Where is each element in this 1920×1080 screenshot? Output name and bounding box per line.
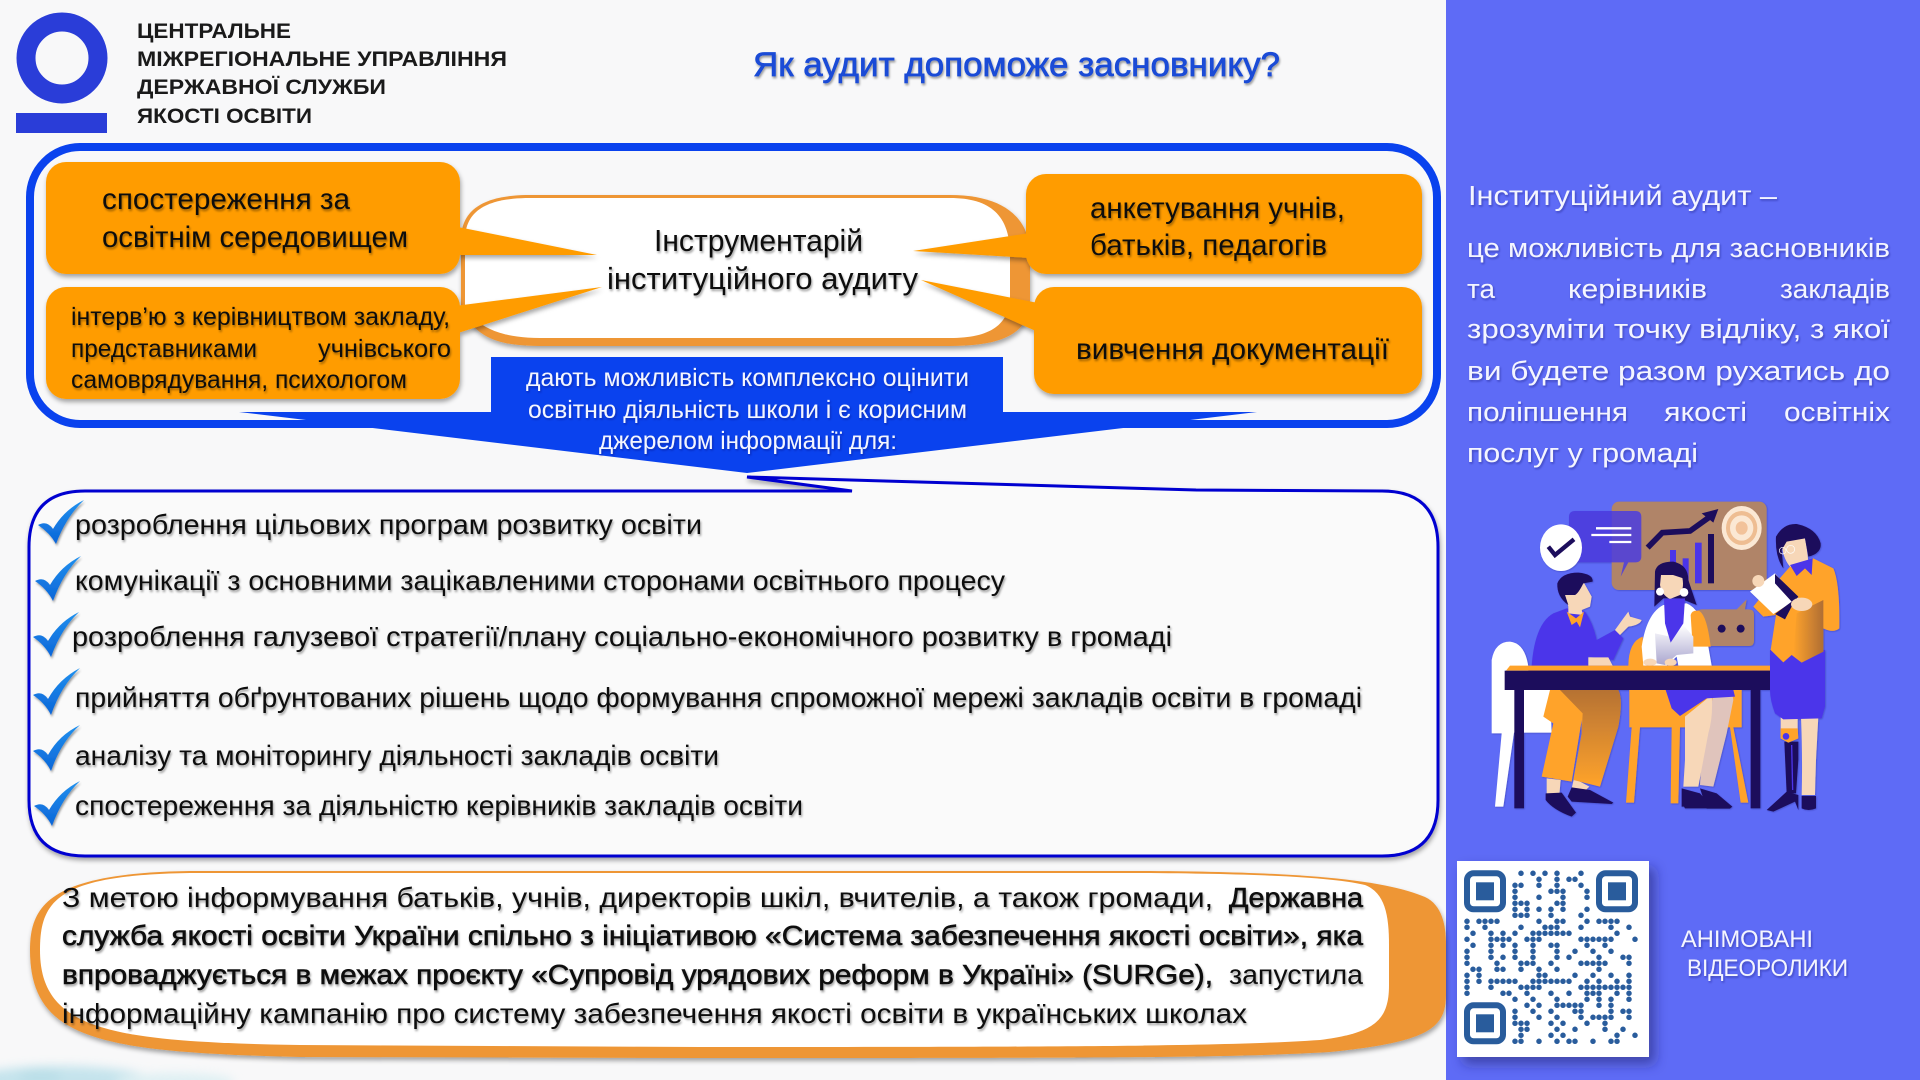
logo bbox=[16, 22, 107, 133]
interview text bbox=[71, 303, 451, 394]
watercolor accent bottom left bbox=[0, 1066, 235, 1080]
sidebar paragraph: якості bbox=[1664, 397, 1747, 427]
organisation name: ЯКОСТІ ОСВІТИ bbox=[137, 104, 312, 128]
target bbox=[1722, 506, 1762, 550]
surveys text bbox=[1090, 192, 1345, 262]
organisation name bbox=[137, 19, 507, 128]
QR data modules bbox=[1467, 873, 1635, 1041]
surveys text: анкетування учнів, bbox=[1090, 192, 1345, 225]
sidebar paragraph: закладів bbox=[1780, 274, 1890, 304]
illustration: team meeting bbox=[1492, 502, 1839, 817]
blue callout text: освітню діяльність школи і є корисним bbox=[528, 396, 967, 424]
checklist text: розроблення цільових програм розвитку освіти bbox=[75, 509, 702, 540]
right sidebar background bbox=[1446, 0, 1920, 1080]
central bubble text bbox=[607, 223, 918, 296]
blue callout text: дають можливість комплексно оцінити bbox=[526, 364, 969, 392]
campaign text: служба якості освіти України спільно з ініціативою «Система забезпечення якості освіти», яка bbox=[62, 920, 1363, 951]
QR finder patterns bbox=[1467, 873, 1635, 1041]
page background bbox=[0, 0, 1446, 1080]
panel: audit tools frame bbox=[30, 147, 1437, 424]
observation text: освітнім середовищем bbox=[102, 221, 408, 254]
video caption: ВІДЕОРОЛИКИ bbox=[1687, 955, 1848, 982]
blue callout text bbox=[526, 364, 969, 455]
orange chair bbox=[1626, 637, 1748, 803]
checklist text bbox=[72, 509, 1362, 821]
blue callout arrow bbox=[239, 357, 1257, 473]
callout: surveys bbox=[913, 174, 1422, 274]
checklist text: комунікації з основними зацікавленими сторонами освітнього процесу bbox=[75, 565, 1005, 596]
panel: purposes list bbox=[29, 477, 1438, 856]
sidebar paragraph: керівників bbox=[1568, 274, 1707, 304]
campaign text: Державна bbox=[1229, 882, 1363, 913]
sidebar paragraph bbox=[1467, 233, 1891, 468]
interview text: інтерв’ю з керівництвом закладу, bbox=[71, 303, 450, 331]
checklist text: спостереження за діяльністю керівників закладів освіти bbox=[75, 790, 803, 821]
presentation board bbox=[1612, 502, 1767, 590]
table bbox=[1505, 666, 1770, 808]
sidebar paragraph: ви будете разом рухатись до bbox=[1467, 356, 1890, 386]
sidebar heading: Інституційний аудит – bbox=[1468, 180, 1777, 211]
organisation name: ЦЕНТРАЛЬНЕ bbox=[137, 19, 291, 43]
check circle bbox=[1540, 524, 1582, 571]
campaign text: запустила bbox=[1229, 959, 1363, 990]
campaign text: інформаційну кампанію про систему забезпечення якості освіти в українських школах bbox=[62, 998, 1247, 1029]
callout: documents bbox=[921, 280, 1422, 394]
interview text: представниками bbox=[71, 335, 257, 363]
sidebar paragraph: освітніх bbox=[1784, 397, 1891, 427]
sidebar paragraph: послуг у громаді bbox=[1467, 438, 1698, 468]
blue callout text: джерелом інформації для: bbox=[599, 427, 897, 455]
callout: interview bbox=[46, 287, 602, 399]
campaign text: З метою інформування батьків, учнів, директорів шкіл, вчителів, а також громади, bbox=[62, 882, 1213, 913]
video caption bbox=[1681, 926, 1848, 982]
sidebar paragraph: та bbox=[1467, 274, 1496, 304]
observation text bbox=[102, 183, 408, 254]
organisation name: ДЕРЖАВНОЇ СЛУЖБИ bbox=[137, 75, 386, 99]
documents text: вивчення документації bbox=[1076, 333, 1390, 366]
campaign text: впроваджується в межах проєкту «Супровід урядових реформ в Україні» (SURGe), bbox=[62, 959, 1213, 990]
seated man bbox=[1532, 573, 1642, 817]
seated woman bbox=[1642, 562, 1735, 809]
checklist text: прийняття обґрунтованих рішень щодо формування спроможної мережі закладів освіти в громаді bbox=[75, 682, 1362, 713]
checklist text: розроблення галузевої стратегії/плану соціально-економічного розвитку в громаді bbox=[72, 621, 1172, 652]
growth arrow and bars bbox=[1648, 509, 1718, 583]
QR code bbox=[1457, 861, 1649, 1057]
callout: observation bbox=[46, 162, 597, 274]
panel: information campaign bbox=[30, 871, 1446, 1058]
sidebar paragraph: поліпшення bbox=[1467, 397, 1628, 427]
central bubble text: інституційного аудиту bbox=[607, 261, 918, 296]
sidebar paragraph: це можливість для засновників bbox=[1467, 233, 1890, 263]
speech bubble bbox=[1569, 511, 1641, 577]
campaign text bbox=[62, 882, 1363, 1029]
title: Як аудит допоможе засновнику? bbox=[753, 46, 1280, 84]
interview text: учнівського bbox=[318, 335, 451, 363]
central bubble text: Інструментарій bbox=[654, 223, 863, 258]
observation text: спостереження за bbox=[102, 183, 350, 216]
dots bubble bbox=[1697, 599, 1754, 646]
checklist text: аналізу та моніторингу діяльності закладів освіти bbox=[75, 740, 719, 771]
organisation name: МІЖРЕГІОНАЛЬНЕ УПРАВЛІННЯ bbox=[137, 47, 507, 71]
sidebar paragraph: зрозуміти точку відліку, з якої bbox=[1467, 314, 1891, 344]
surveys text: батьків, педагогів bbox=[1090, 229, 1327, 262]
central bubble bbox=[461, 195, 1030, 346]
standing woman bbox=[1750, 524, 1839, 812]
interview text: самоврядування, психологом bbox=[71, 366, 407, 394]
white chair bbox=[1492, 642, 1552, 807]
video caption: АНІМОВАНІ bbox=[1681, 926, 1813, 953]
checklist icons bbox=[33, 500, 84, 826]
